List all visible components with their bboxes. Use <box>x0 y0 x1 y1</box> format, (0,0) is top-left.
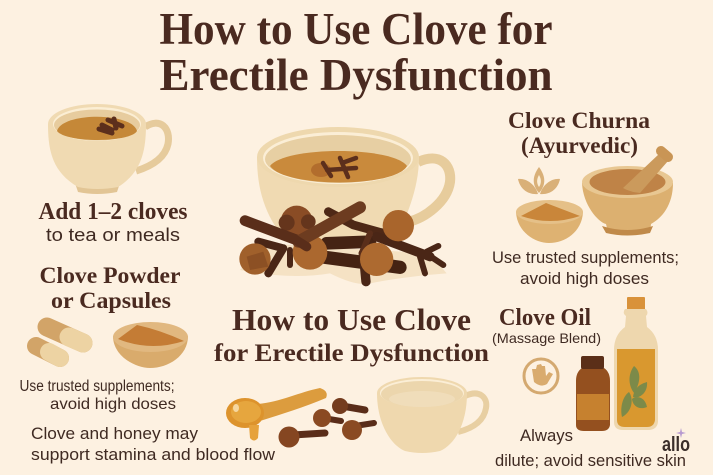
icon: small amber bottle <box>576 356 610 431</box>
heading: clove churna <box>508 108 651 158</box>
text: always dilute: Always <box>520 426 573 445</box>
text: add cloves: to tea or meals <box>46 225 180 245</box>
logo: allo <box>662 428 690 456</box>
text: add cloves <box>38 199 188 245</box>
icon: large oil bottle <box>614 297 658 430</box>
illustration: main cup with cloves <box>239 127 450 284</box>
text: add cloves: Add 1–2 cloves <box>38 199 188 225</box>
logo: allo: allo <box>662 434 690 456</box>
icon: mortar and pestle <box>582 151 673 236</box>
icon: plain cup <box>377 377 486 453</box>
icon: honey spoon <box>226 388 327 440</box>
text: always dilute: dilute; avoid sensitive skin <box>495 451 686 470</box>
heading: clove powder or capsules: or Capsules <box>51 288 171 313</box>
heading: clove powder or capsules <box>40 263 180 313</box>
text: supplements left <box>20 378 176 413</box>
icon: loose cloves <box>278 398 374 448</box>
icon: tea cup with cloves <box>48 104 168 194</box>
text: clove and honey: support stamina and blood flow <box>31 446 275 464</box>
text: always dilute <box>495 426 686 470</box>
text: supplements right <box>492 249 679 288</box>
text: supplements left: Use trusted supplements; <box>20 378 174 395</box>
text: supplements left: avoid high doses <box>50 396 176 413</box>
icon: capsules <box>36 327 83 358</box>
heading: clove oil: (Massage Blend) <box>492 330 601 346</box>
heading: clove oil <box>492 305 601 346</box>
text: clove and honey <box>31 425 275 464</box>
heading: clove oil: Clove Oil <box>499 305 591 331</box>
heading: clove powder or capsules: Clove Powder <box>40 263 180 288</box>
title <box>160 4 552 100</box>
icon: pile of cloves <box>239 206 447 284</box>
heading: clove churna: (Ayurvedic) <box>521 133 638 158</box>
icon: powder bowl <box>113 322 188 368</box>
title: How to Use Clove for <box>160 4 552 54</box>
icon: main cup <box>257 127 450 240</box>
icon: herb leaves <box>518 167 560 194</box>
icon: hand in circle <box>524 359 558 393</box>
text: supplements right: Use trusted supplements; <box>492 249 679 267</box>
heading: center <box>214 302 489 367</box>
heading: center: for Erectile Dysfunction <box>214 340 489 367</box>
title: Erectile Dysfunction <box>160 50 552 100</box>
text: supplements right: avoid high doses <box>520 270 649 288</box>
heading: clove churna: Clove Churna <box>508 108 651 133</box>
heading: center: How to Use Clove <box>232 302 471 337</box>
icon: churna bowl <box>516 200 583 243</box>
text: clove and honey: Clove and honey may <box>31 425 199 443</box>
